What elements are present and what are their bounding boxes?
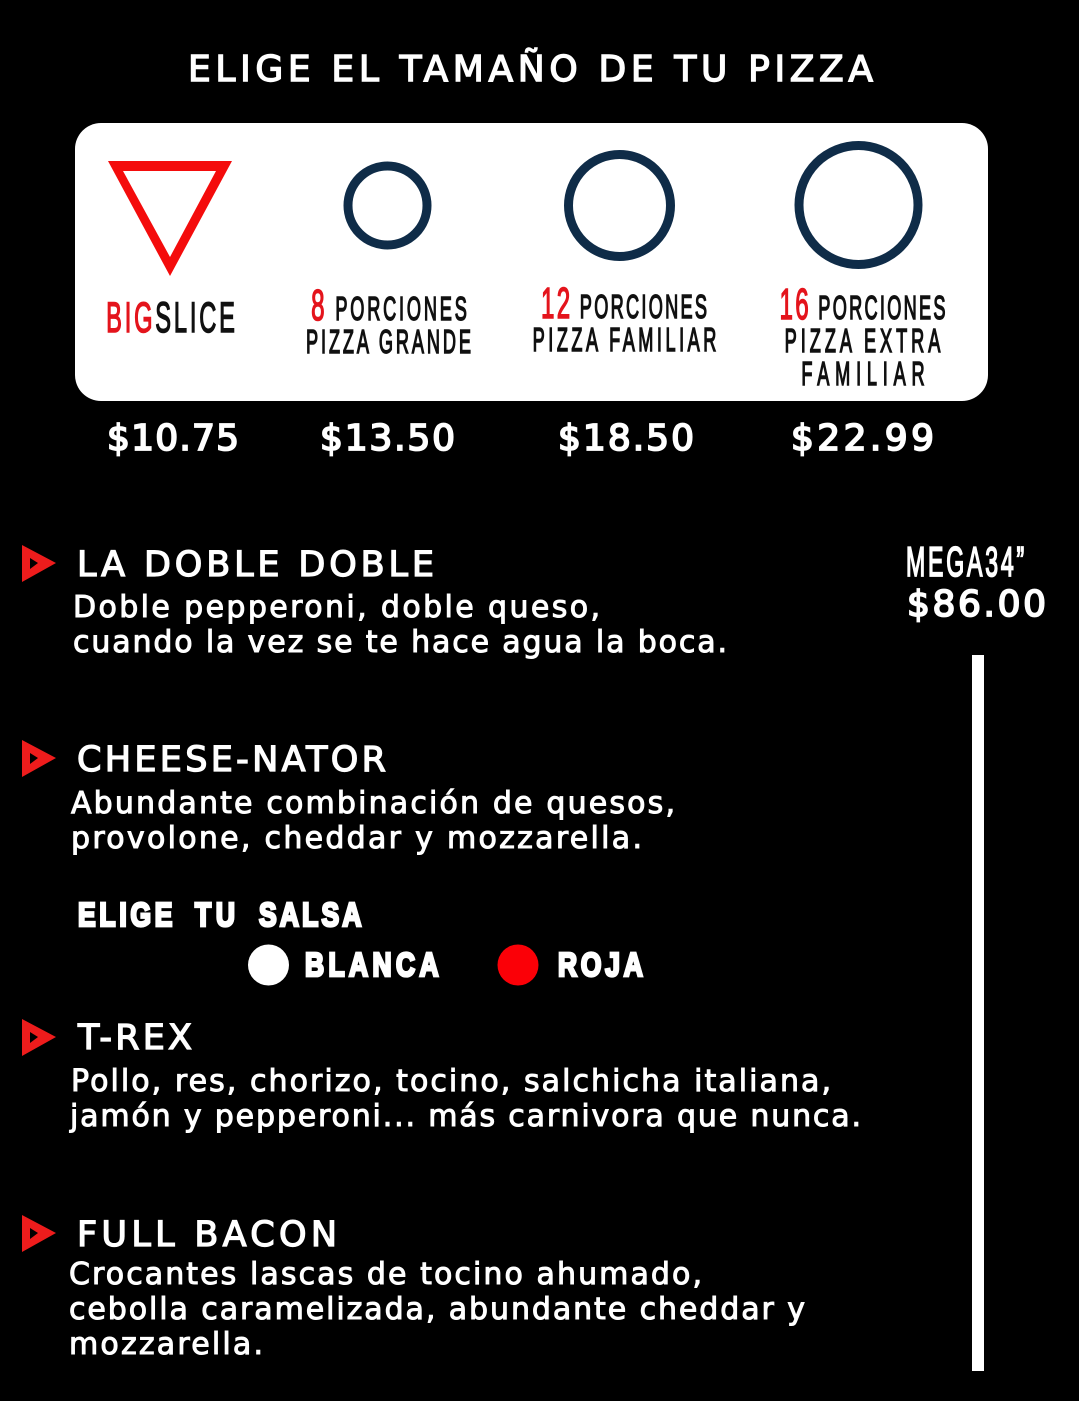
- icon: family pizza circle: [568, 154, 670, 256]
- label: 12 porciones: 12 PORCIONES: [541, 278, 707, 328]
- label: 16 porciones: FAMILIAR: [801, 355, 925, 392]
- prices row: $13.50: [320, 418, 455, 459]
- mega price: [906, 539, 1046, 625]
- prices row: [107, 418, 934, 459]
- panel: pizza sizes: [75, 123, 988, 401]
- label: big slice: BIGSLICE: [106, 295, 235, 342]
- item: la doble doble: Doble pepperoni, doble queso,: [73, 590, 600, 625]
- item: t-rex: [22, 1018, 861, 1134]
- label: 8 porciones: PIZZA GRANDE: [306, 323, 471, 360]
- label: 12 porciones: PIZZA FAMILIAR: [533, 321, 716, 358]
- item: cheese-nator: provolone, cheddar y mozzarella.: [71, 821, 642, 856]
- label: 16 porciones: PIZZA EXTRA: [785, 322, 940, 359]
- sauce option: blanca: [248, 944, 439, 986]
- item: full bacon: [22, 1215, 805, 1362]
- vertical divider: [972, 655, 984, 1371]
- item: full bacon: FULL BACON: [77, 1215, 337, 1255]
- label: 16 porciones: [779, 279, 946, 392]
- icon: red play arrow: [22, 545, 56, 582]
- sauce heading: ELIGE: [78, 897, 172, 934]
- item: t-rex: jamón y pepperoni... más carnivora que nunca.: [69, 1099, 861, 1134]
- icon: red play arrow: [22, 1019, 56, 1056]
- icon: slice triangle: [108, 161, 232, 276]
- item: cheese-nator: Abundante combinación de quesos,: [71, 786, 675, 821]
- item: la doble doble: [22, 545, 727, 660]
- item: t-rex: T-REX: [77, 1018, 192, 1058]
- mega price: MEGA34”: [906, 539, 1024, 586]
- prices row: $22.99: [791, 418, 934, 459]
- sauce option: roja: ROJA: [558, 947, 643, 984]
- item: la doble doble: cuando la vez se te hace agua la boca.: [73, 625, 727, 660]
- prices row: $10.75: [107, 418, 239, 459]
- sauce option: roja: [498, 944, 643, 986]
- mega price: $86.00: [907, 584, 1046, 625]
- prices row: $18.50: [558, 418, 694, 459]
- item: full bacon: cebolla caramelizada, abundante cheddar y: [69, 1292, 805, 1327]
- icon: extra family pizza circle: [799, 146, 918, 264]
- item: cheese-nator: CHEESE-NATOR: [77, 740, 386, 780]
- item: t-rex: Pollo, res, chorizo, tocino, salchicha italiana,: [71, 1064, 831, 1099]
- item: full bacon: Crocantes lascas de tocino ahumado,: [69, 1257, 702, 1292]
- item: la doble doble: LA DOBLE DOBLE: [77, 545, 434, 585]
- label: 12 porciones: [533, 278, 716, 358]
- item: full bacon: mozzarella.: [69, 1327, 263, 1362]
- item: cheese-nator: [22, 740, 675, 856]
- title: ELIGE EL TAMAÑO DE TU PIZZA: [188, 48, 873, 90]
- label: 16 porciones: 16 PORCIONES: [779, 279, 946, 329]
- label: 8 porciones: [306, 280, 471, 360]
- icon: large pizza circle: [348, 166, 427, 245]
- sauce heading: [78, 897, 361, 934]
- label: 8 porciones: 8 PORCIONES: [311, 280, 467, 330]
- icon: red play arrow: [22, 1215, 56, 1252]
- sauce heading: SALSA: [259, 897, 361, 934]
- sauce option: blanca: BLANCA: [305, 947, 439, 984]
- icon: red play arrow: [22, 740, 56, 777]
- sauce heading: TU: [195, 897, 235, 934]
